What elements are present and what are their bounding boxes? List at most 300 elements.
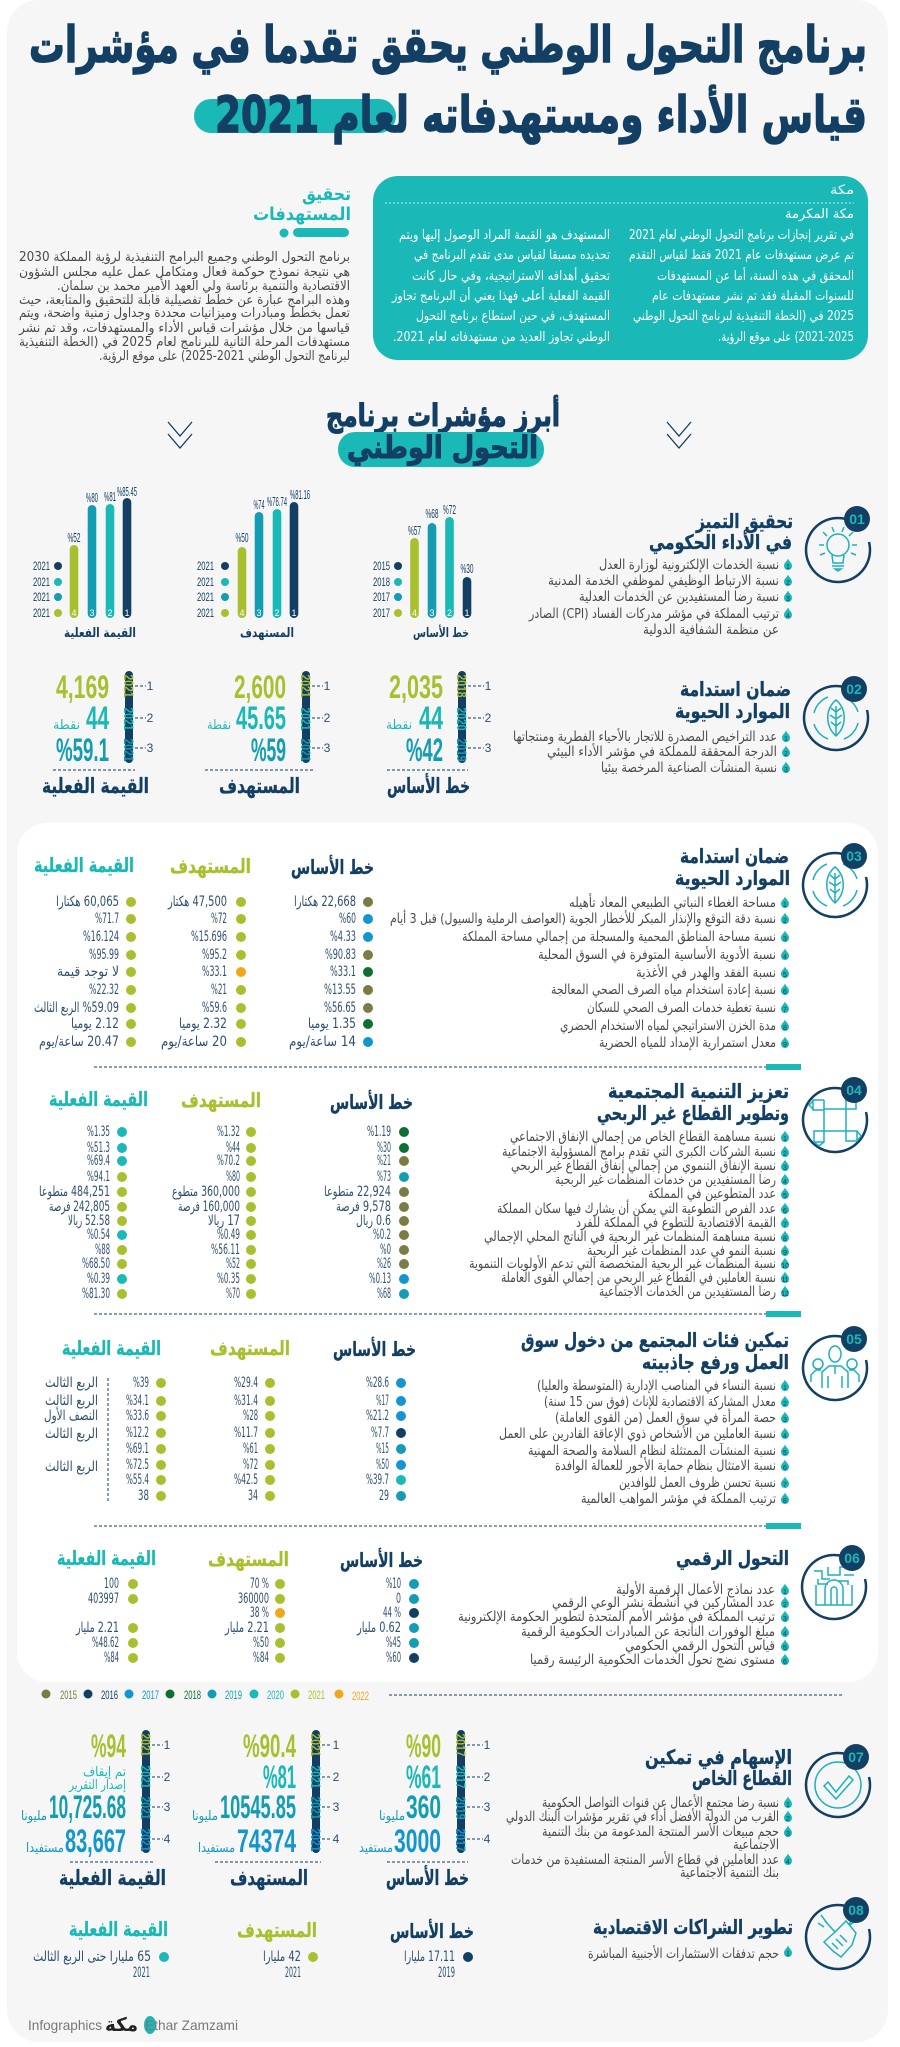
list: section 05 indicators: نسبة المنشآت الممتثلة لنظام السلامة والصحة المهنية [528,1442,776,1459]
column: section 04 actual: %0.39 [87,1271,110,1287]
column: section 05 baseline [333,1336,416,1504]
list: section 03 indicators: معدل استمرارية الإمداد للمياه الحضرية [599,1035,776,1051]
column: section 03 baseline: %56.65 [324,1000,356,1016]
column: section 06 target [208,1547,289,1666]
heading: section 08: تطوير الشراكات الاقتصادية [593,1915,793,1939]
list: section 05 indicators: 5 [783,1450,787,1457]
bar chart: target: 2021 [197,575,214,589]
stat column: section 02 baseline: 2018 [454,674,470,698]
column: section 04 target: %70.2 [217,1153,240,1169]
list: section 04 indicators: 4 [783,1179,787,1186]
column: section 03 target: 2.32 يوميا [179,1016,227,1032]
column: section 05 actual: الربع الثالث [45,1375,98,1391]
icon: 08 handshake: 08 [848,1902,864,1918]
list: section 05 indicators: حصة المرأة في سوق العمل (من القوى العاملة) [555,1408,776,1426]
stat column: section 07 target: 2 [333,1770,340,1784]
icon: 03 leaf [803,843,867,917]
list: section 05 indicators: معدل المشاركة الاقتصادية للإناث (فوق سن 15 سنة) [544,1394,776,1410]
list: section 03 indicators: نسبة مساحة المناطق المحمية والمسجلة من إجمالي مساحة المملكة [462,929,776,945]
list: section 04 indicators: 3 [783,1165,787,1172]
list: section 04 indicators: نسبة مساهمة المنظمات غير الربحية في الناتج المحلي الإجمالي [484,1229,776,1245]
column: section 04 baseline [324,1089,413,1302]
column: section 05 baseline: %21.2 [366,1408,389,1424]
column: section 04 target: 160,000 فرصة [178,1199,240,1215]
list: section 07 indicators: الاجتماعية [733,1837,779,1853]
column: section 05 baseline: %39.7 [366,1472,389,1488]
list: section 03 indicators: 4 [783,954,787,961]
heading: section 01 [649,509,793,555]
bar chart: target: %50 [236,530,248,545]
list: section 06 indicators: ترتيب المملكة في مؤشر الأمم المتحدة لتطوير الحكومة الإلكترونية [458,1608,775,1625]
heading: section 02: ضمان استدامة [680,677,791,701]
list: section 01 indicators: نسبة الخدمات الإلكترونية لوزارة العدل [599,557,779,573]
stat column: section 07 target: 2021 [308,1766,324,1789]
column: section 05 baseline: %15 [376,1441,389,1457]
column: section 05 baseline: %50 [376,1457,389,1473]
bar chart: baseline: 2017 [373,590,390,604]
panel: teal definition box: المستهدف، في حين استطاع برنامج التحول [416,309,610,324]
list: section 01 indicators: نسبة رضا المستفيدين عن الخدمات العدلية [579,589,779,605]
list: section 01 indicators: ترتيب المملكة في مؤشر مدركات الفساد (CPI) الصادر [528,606,779,622]
list: section 04 indicators: نسبة مساهمة القطاع الخاص من إجمالي الإنفاق الاجتماعي [510,1129,776,1145]
stat column: section 07 actual: 2021 [138,1796,154,1820]
icon: 06 digital fingerprint: 06 [844,1550,860,1566]
stat column: section 07 baseline: 2017 [453,1828,469,1852]
icon: 03 leaf: 03 [846,848,862,864]
icon: 07 check mark: 07 [848,1749,864,1765]
column: section 06 baseline: % 44 [383,1605,401,1621]
column: section 03 target: %21 [211,982,227,998]
list: section 05 indicators: نسبة العاملين من الأشخاص ذوي الإعاقة القادرين على العمل [499,1425,776,1442]
column: section 04 actual: %68.50 [82,1256,110,1272]
column: section 04 baseline: %30 [377,1140,391,1156]
column: section 05 target: 34 [248,1488,258,1504]
bar chart: target [197,487,310,641]
stat column: section 02 baseline: 1 [485,679,492,693]
list: section 02 indicators: 2 [784,751,788,758]
list: section 01 indicators: 3 [786,596,790,603]
text block: introduction: وهذه البرامج عبارة عن خطط تفصيلية قابلة للتحقيق والمتابعة، حيث [19,293,350,308]
list: section 04 indicators: نسبة الشركات الكبرى التي تقدم برامج المسؤولية الاجتماعية [502,1144,776,1160]
list: section 04 indicators: نسبة العاملين في القطاع غير الربحي من إجمالي القوى العاملة [501,1270,776,1286]
stat column: section 02 baseline: 2 [485,711,492,725]
column: section 05 actual: %33.6 [126,1408,149,1424]
list: section 04 indicators: 9 [783,1250,787,1257]
stat column: section 02 target: 2021 [298,674,314,698]
stat column: section 02 target: %59 [251,732,286,768]
column: section 05 actual: %72.5 [126,1457,149,1473]
column: section 05 target: %31.4 [234,1393,258,1409]
stat column: section 02 baseline: خط الأساس [387,772,470,798]
column: section 03 actual: %95.99 [89,947,119,963]
column: section 05 actual: الربع الثالث [45,1393,98,1409]
column: section 05 baseline: %28.6 [366,1375,389,1391]
list: section 06 indicators: قياس التحول الرقمي الحكومي [625,1638,775,1654]
list: section 04 indicators [469,1129,789,1300]
column: section 04 target: 17 ريالا [208,1213,240,1229]
column: section 06 target: %84 [253,1650,269,1666]
column: section 04 baseline: %21 [377,1153,391,1169]
heading: section 07: القطاع الخاص [692,1766,792,1790]
stat column: section 07 target: 2021 [308,1828,324,1852]
text: %85.45 [117,484,137,499]
stat column: section 07 target: 3 [333,1800,340,1814]
column: section 06 actual: القيمة الفعلية [57,1546,156,1570]
legend: years: 2019 [225,1688,242,1702]
stat column: section 07 target: 74374 [237,1823,296,1859]
column: section 04 actual: 52.58 ريالا [68,1213,110,1229]
column: section 03 target: %72 [211,911,227,927]
column: section 06 target: 360000 [238,1591,269,1607]
list: section 03 indicators: 6 [783,989,787,996]
list: section 04 indicators: 6 [783,1208,787,1215]
column: section 04 target: المستهدف [181,1088,261,1112]
column: section 03 actual: 60,065 هكتارا [56,894,119,910]
column: section 04 actual: القيمة الفعلية [49,1087,148,1111]
column: section 05 target: %28 [243,1408,258,1424]
list: section 07 indicators: 3 [786,1831,790,1838]
list: section 03 indicators: 5 [783,972,787,979]
list: section 04 indicators: رضا المستفيدين من خدمات المنظمات غير الربحية [555,1172,776,1188]
stat column: section 07 target: 2021 [308,1734,324,1757]
heading: section 01: تحقيق التميز [695,509,793,533]
stat column: section 02 actual: نقطة [53,718,80,733]
column: section 06 target: المستهدف [208,1547,289,1571]
column: section 04 baseline: 9,578 فرصة [336,1199,391,1215]
bar chart: baseline: %72 [443,502,456,517]
stat column: section 07 baseline: 3000 [394,1823,441,1859]
list: section 06 indicators: 6 [783,1659,787,1666]
stat column: section 07 baseline: 4 [484,1832,491,1846]
list: section 07 indicators: 4 [786,1859,790,1866]
list: section 03 indicators [390,893,789,1051]
list: section 02 indicators: 3 [784,767,788,774]
column: section 04 baseline: خط الأساس [330,1089,413,1114]
stat column: section 02 baseline: نقطة [386,718,412,733]
column: section 04 baseline: %0 [380,1242,391,1258]
stat column: section 07 baseline: 2019 [453,1796,469,1820]
panel: teal definition box: 2025 في (الخطة التنفيذية لبرنامج التحول الوطني [633,309,854,324]
stat column: section 07 actual: مليونا [21,1809,47,1824]
list: section 04 indicators: عدد الفرص التطوعية التي يمكن أن يشارك فيها سكان المملكة [497,1199,776,1217]
stat column: section 07 baseline: 3 [484,1800,491,1814]
list: section 04 indicators: نسبة النمو في عدد المنظمات غير الربحية [587,1243,776,1259]
list: section 03 indicators: نسبة الفقد والهدر في الأغذية [636,964,776,981]
icon: left chevrons [168,422,192,448]
column: section 05 target [210,1336,290,1504]
column: section 08 actual: 65 مليارا حتى الربع الثالث [33,1949,151,1965]
list: section 05 indicators: 4 [783,1433,787,1440]
column: section 03 actual: %22.32 [89,982,119,998]
stat column: section 02 target: 1 [324,679,331,693]
list: section 07 indicators: نسبة رضا مجتمع الأعمال عن قنوات التواصل الحكومية [542,1794,779,1811]
column: section 04 target: %52 [226,1256,240,1272]
column: section 08 target: المستهدف [237,1918,317,1942]
column: section 04 actual: %0.54 [87,1227,110,1243]
column: section 06 target: % 70 [250,1576,269,1592]
text block: introduction: لبرنامج التحول الوطني 2021-2025) على موقع الرؤية. [99,349,350,364]
column: section 03 actual: %59.09 الربع الثالث [34,1000,119,1016]
stat column: section 02 actual: 44 [86,700,109,736]
text: %81.16 [290,487,310,502]
heading: section 01: في الأداء الحكومي [649,529,792,555]
stat column: section 07 target: مستفيدا [198,1841,235,1856]
panel: teal definition box: مكة المكرمة [785,207,854,222]
bar chart: actual: 4 [71,608,77,618]
column: section 04 actual: %88 [95,1242,110,1258]
column: section 05 actual: الربع الثالث [45,1459,98,1475]
column: section 03 baseline: 22,668 هكتارا [294,894,356,910]
text block: introduction [18,250,350,364]
icon: 02 leaf [804,676,868,750]
text block: introduction: برنامج التحول الوطني وجميع البرامج التنفيذية لرؤية المملكة 2030 [19,250,350,265]
column: section 08 target [237,1918,318,1981]
column: section 05 target: %42.5 [234,1472,258,1488]
column: section 04 actual: %1.35 [87,1124,110,1140]
column: section 06 target: %50 [253,1635,269,1651]
list: section 07 indicators: 1 [786,1802,790,1809]
list: section 05 indicators: ترتيب المملكة في مؤشر المواهب العالمية [581,1491,776,1507]
column: section 04 actual: 242,805 فرصة [49,1199,110,1215]
stat column: section 07 actual: تم إيقاف [83,1765,126,1780]
panel: teal definition box [373,176,868,360]
list: section 05 indicators: نسبة الامتثال بنظام حماية الأجور للعمالة الوافدة [555,1457,776,1474]
bar chart: baseline: 1 [464,608,470,618]
stat column: section 07 actual: %94 [91,1728,126,1764]
list: section 06 indicators: عدد المشاركين في أنشطة نشر الوعي الرقمي [552,1593,775,1611]
column: section 04 baseline: 22,924 متطوعا [324,1184,391,1200]
heading: section 04 [597,1079,789,1126]
bar chart: target: 4 [239,608,245,618]
column: section 04 baseline: %73 [377,1169,391,1185]
stat column: section 07 actual: 1 [164,1738,171,1752]
column: section 04 baseline: %0.2 [373,1227,391,1243]
column: section 06 actual: 403997 [88,1591,119,1607]
column: section 08 baseline: 17.11 مليارا [404,1949,455,1965]
stat column: section 02 actual: %59.1 [56,732,109,768]
column: section 06 actual [57,1546,156,1666]
list: section 01 indicators: نسبة الارتباط الوظيفي لموظفي الخدمة المدنية [548,573,779,589]
list: section 01 indicators [528,557,792,638]
icon: 02 leaf: 02 [846,681,862,697]
panel: teal definition box: للسنوات المقبلة فقد تم نشر مستهدفات عام [652,289,854,304]
list: section 03 indicators: 9 [783,1042,787,1049]
list: section 03 indicators: 2 [783,918,787,925]
legend: years: 2016 [101,1688,118,1702]
stat column: section 07 actual: 2021 [138,1828,154,1852]
list: section 07 indicators: حجم مبيعات الأسر المنتجة المدعومة من بنك التنمية [542,1823,779,1840]
heading: section 07: الإسهام في تمكين [645,1745,792,1770]
bar chart: target: المستهدف [240,626,294,641]
stat column: section 02 baseline: %42 [406,732,443,768]
legend: years [42,1688,369,1703]
bar chart: actual: القيمة الفعلية [64,626,136,641]
column: section 04 actual: %94.1 [87,1169,110,1185]
column: section 03 target: %33.1 [202,964,227,980]
stat column: section 07 baseline: خط الأساس [386,1864,469,1890]
column: section 04 target: %80 [226,1169,240,1185]
column: section 05 actual: النصف الأول [44,1406,98,1424]
column: section 04 baseline: %26 [377,1256,391,1272]
panel: teal definition box: المحقق في هذه السنة، أما عن المستهدفات [657,267,854,284]
list: section 03 indicators: 3 [783,936,787,943]
list: section 03 indicators: 7 [783,1007,787,1014]
column: section 06 target: % 38 [250,1605,269,1621]
bar chart: baseline: %68 [426,506,438,521]
stat column: section 02 target: 2021 [298,738,314,762]
list: section 04 indicators: نسبة الإنفاق التنموي من إجمالي إنفاق القطاع غير الربحي [511,1158,776,1174]
stat column: section 07 actual: إصدار التقرير [68,1778,126,1793]
column: section 03 baseline [289,854,374,1050]
legend: years: 2018 [184,1688,201,1702]
list: section 04 indicators: 5 [783,1193,787,1200]
column: section 05 baseline: 29 [379,1488,389,1504]
icon: 05 people [803,1326,867,1400]
list: section 05 indicators: 2 [783,1401,787,1408]
column: section 05 baseline: %17 [376,1393,389,1409]
list: section 03 indicators: 8 [783,1025,787,1032]
footer credits: مكة [105,2014,138,2036]
heading: section 06: التحول الرقمي [676,1546,789,1571]
column: section 03 target: 47,500 هكتار [167,894,227,910]
stat column: section 07 target [192,1728,340,1890]
column: section 06 baseline: %45 [386,1635,401,1651]
list: section 06 indicators: 2 [783,1602,787,1609]
column: section 06 actual: %84 [104,1650,119,1666]
list: section 04 indicators: 1 [783,1136,787,1143]
list: section 03 indicators: نسبة تغطية خدمات الصرف الصحي للسكان [587,1000,776,1016]
stat column: section 02 target: 45.65 [236,700,286,736]
section heading: top indicators [326,395,560,467]
column: section 05 target: %11.7 [234,1425,258,1441]
column: section 03 actual: 20.47 ساعة/يوم [39,1034,119,1050]
column: section 05 target: %61 [243,1441,258,1457]
column: section 04 actual: %69.4 [87,1153,110,1169]
panel: teal definition box: الوطني تجاوز العديد من مستهدفاته لعام 2021. [393,330,610,345]
bar chart: target: %76.74 [267,494,287,509]
icon: 04 joined hands: 04 [846,1082,862,1098]
column: section 03 actual: 2.12 يوميا [71,1016,119,1032]
column: section 05 actual: %69.1 [126,1441,149,1457]
text block: introduction: تعمل بخطط ومبادرات وميزانيات محددة وجداول زمنية واضحة، ويتم [19,306,350,321]
heading: section 05: العمل ورفع جاذبيته [642,1350,789,1374]
footer credits [28,2014,238,2036]
list: section 07 indicators [506,1794,792,1881]
list: section 07 indicators: بنك التنمية الاجتماعية [680,1865,779,1881]
stat column: section 02 actual: 2 [147,711,154,725]
column: section 06 baseline: خط الأساس [340,1547,423,1572]
list: section 04 indicators: 11 [781,1277,789,1284]
stat column: section 07 target: المستهدف [230,1866,308,1890]
icon: 01 lightbulb [806,506,870,582]
stat column: section 07 actual: 2 [164,1770,171,1784]
icon: 06 digital fingerprint [802,1545,866,1619]
bar chart: actual: %81 [104,489,116,504]
heading: section 02 [675,677,791,723]
column: section 04 target: %70 [226,1286,240,1302]
stat column: section 07 baseline [359,1728,491,1890]
column: section 05 baseline: %7.7 [371,1425,389,1441]
bar chart: target: 2 [274,608,280,618]
list: section 06 indicators: 3 [783,1616,787,1623]
stat column: section 07 target: 4 [333,1832,340,1846]
heading: section 03: الموارد الحيوية [675,866,790,890]
column: section 08 actual: 2021 [133,1965,150,1981]
panel: teal definition box: مكة [830,183,854,198]
column: section 05 actual [44,1336,166,1504]
footer credits: Ethar Zamzami [145,2017,238,2033]
stat column: section 02 target [205,669,331,798]
bar chart: target: 2021 [197,590,214,604]
list: section 04 indicators: 7 [783,1222,787,1229]
stat column: section 02 target: 2021 [298,708,314,731]
column: section 03 baseline: خط الأساس [291,854,374,879]
column: section 04 baseline: %68 [377,1286,391,1302]
column: section 03 target: %15.696 [191,929,227,945]
icon: 08 handshake [806,1897,870,1969]
text block: introduction: قياسها من خلال مؤشرات قياس الأداء والمستهدفات، وقد تم نشر [18,319,350,336]
list: section 03 indicators: نسبة الأدوية الأساسية المتوفرة في السوق المحلية [538,946,776,963]
stat column: section 02 actual: القيمة الفعلية [42,774,149,798]
list: section 06 indicators: 1 [783,1589,787,1596]
column: section 03 baseline: %4.33 [330,929,356,945]
stat column: section 07 target: %90.4 [243,1728,296,1764]
column: section 05 actual: %55.4 [126,1472,149,1488]
stat column: section 07 baseline: 1 [484,1738,491,1752]
list: section 06 indicators: 5 [783,1645,787,1652]
footer credits: Infographics [28,2017,102,2033]
stat column: section 02 actual: 4,169 [56,669,109,705]
list: section 04 indicators: نسبة المنظمات غير الربحية المتخصصة التي تدعم الأولويات التنموية [469,1255,776,1272]
column: section 03 actual: %16.124 [83,929,119,945]
column: section 08 baseline [390,1918,474,1981]
column: section 06 actual: %48.62 [92,1635,119,1651]
list: section 06 indicators: مستوى نضج تحول الخدمات الحكومية الرئيسة رقميا [530,1652,775,1668]
stat column: section 07 actual: 3 [164,1800,171,1814]
list: section 06 indicators: عدد نماذج الأعمال الرقمية الأولية [616,1581,775,1598]
section heading: top indicators: التحول الوطني [347,430,538,466]
list: section 06 indicators: مبلغ الوفورات الناتجة عن المبادرات الحكومية الرقمية [521,1624,775,1640]
list: section 04 indicators: 8 [783,1236,787,1243]
stat column: section 02 baseline: 2,035 [389,669,443,705]
stat column: section 07 baseline: مستفيد [359,1841,393,1856]
column: section 03 baseline: %13.55 [324,982,356,998]
column: section 03 actual: %71.7 [95,911,119,927]
column: section 03 target: المستهدف [170,854,251,878]
text block: introduction: هي نتيجة نموذج حوكمة فعال ومتكامل عمل عليه مجلس الشؤون [19,265,350,280]
column: section 04 target: %44 [226,1140,240,1156]
bar chart: target: 1 [291,608,297,618]
stat column: section 02 target: نقطة [207,718,231,733]
list: section 03 indicators: مساحة الغطاء النباتي الطبيعي المعاد تأهيله [569,893,776,911]
column: section 05 target: المستهدف [210,1336,290,1360]
heading: section 05 [521,1328,789,1374]
stat column: section 07 actual [21,1728,171,1890]
stat column: section 07 actual: مستفيدا [26,1841,64,1856]
bar chart: baseline: 3 [429,608,435,618]
list: section 08 indicators: حجم تدفقات الاستثمارات الأجنبية المباشرة [588,1945,779,1962]
panel: teal definition box: تحقيق أهدافه الاستراتيجية، وفي حال كانت [412,267,610,284]
column: section 04 baseline: 0.6 ريال [356,1213,391,1229]
stat column: section 07 actual: 2021 [138,1766,154,1789]
panel: white indicators panel [17,823,878,1682]
bar chart: actual: 1 [124,608,130,618]
bar chart: baseline: 2015 [373,559,390,573]
bar chart: baseline: 4 [412,608,417,618]
list: section 05 indicators: 3 [783,1417,787,1424]
column: section 05 baseline: خط الأساس [333,1336,416,1361]
stat column: section 02 actual [42,669,154,798]
